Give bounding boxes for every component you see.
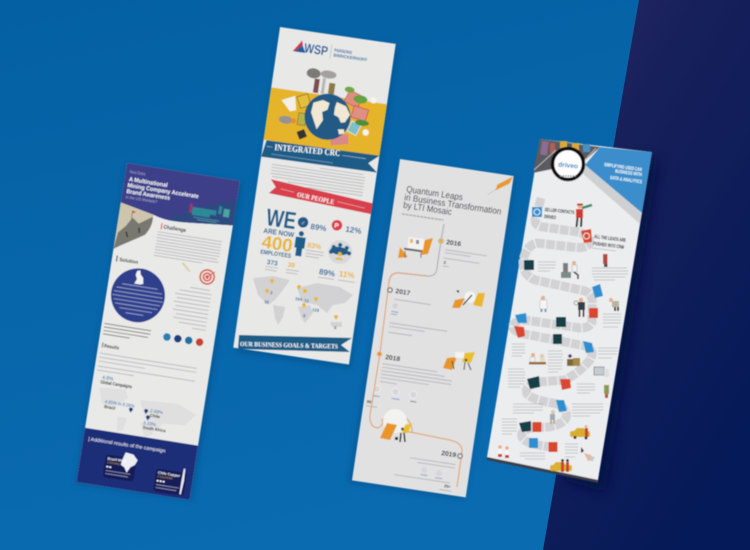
stat: 89 percent men <box>297 216 328 233</box>
stat: we are now 400 employees <box>260 204 298 260</box>
world map: 72 <box>304 298 310 304</box>
ribbon: our people <box>268 179 374 214</box>
ribbon: our people: OUR PEOPLE <box>296 191 335 206</box>
city illustration <box>329 85 378 151</box>
stat row: 89 and 11 percent: 89% <box>318 267 336 278</box>
header: Mining Company Accelerate <box>127 183 200 200</box>
illustration: cliff climbers <box>113 203 155 254</box>
icon: dart <box>181 262 192 272</box>
stat: we are now 400 employees: EMPLOYEES <box>260 250 291 260</box>
step markers <box>514 260 603 452</box>
timeline markers <box>377 238 462 458</box>
social icons <box>163 333 204 347</box>
subtitle <box>402 214 443 220</box>
2019 text: 2019 <box>441 450 457 459</box>
stat row: 373 and 38 <box>265 258 300 274</box>
card: Chile copper: 2 Countries <box>157 474 173 481</box>
stat row: 89 and 11 percent <box>318 266 356 282</box>
card: Brazil mine: 1 Country <box>107 460 121 466</box>
solution note <box>103 323 151 341</box>
timeline path <box>370 224 462 487</box>
card: Brazil mine <box>103 449 139 482</box>
step: all the leads: PUSHED INTO CRM <box>593 241 624 251</box>
panel: LTI Mosaic timeline <box>352 159 514 497</box>
world map: 6 <box>334 325 338 330</box>
intro text <box>269 161 366 196</box>
header <box>119 163 240 230</box>
globe <box>301 91 354 143</box>
figure: meeting people <box>529 353 546 364</box>
header: blue <box>582 147 652 224</box>
WSP logo <box>292 39 369 64</box>
header: How Does <box>129 169 147 177</box>
global campaigns stat: Global Campaigns <box>100 379 133 390</box>
world map: 10 <box>264 299 270 305</box>
stat row: 89 and 11 percent: 11% <box>338 269 355 280</box>
figure: yellow car bottom <box>550 459 572 472</box>
world map: 6 <box>303 313 307 318</box>
stat: we are now 400 employees: 400 <box>260 232 294 256</box>
south africa stat: South Africa <box>142 425 166 433</box>
title <box>403 184 503 224</box>
header: in the US Markets? <box>125 194 158 204</box>
figure: doctor man <box>540 296 547 312</box>
WSP logo: WSP <box>303 40 329 59</box>
section: results <box>97 342 198 385</box>
2016 text: 2016 <box>446 239 462 248</box>
stat: 12 percent women: P <box>334 222 340 230</box>
figure: yellow car <box>570 425 590 440</box>
figure: inspector <box>574 298 585 317</box>
2016 text: 2 <box>443 260 447 265</box>
solution text right <box>170 285 212 330</box>
figure: boxes <box>567 354 580 366</box>
icon: person <box>293 230 307 257</box>
footer: additional results <box>76 428 198 500</box>
stat: 83 percent <box>305 242 325 259</box>
title: by LTI Mosaic <box>403 200 453 217</box>
logo ring <box>552 148 584 180</box>
results map <box>93 385 199 445</box>
world map: 129 <box>312 307 320 313</box>
header: A Multinational <box>128 177 168 189</box>
title: in Business Transformation <box>404 192 502 217</box>
illustration: 2019 <box>380 409 412 442</box>
section: results: Results <box>104 343 120 352</box>
south africa stat: 3.10% <box>143 420 156 427</box>
background: navy panel <box>543 0 750 550</box>
banner: integrated CRC: INTEGRATED CRC <box>274 142 341 158</box>
brazil stat <box>104 399 135 414</box>
section: challenge: Challenge <box>163 225 187 234</box>
world map <box>253 276 353 330</box>
card: Brazil mine: Brazil Mine <box>107 457 127 464</box>
header: Brand Awareness <box>126 189 171 202</box>
global campaigns stat <box>100 375 133 390</box>
card: Chile copper: Chile Copper <box>158 471 181 478</box>
panel: driveo used car infographic <box>487 139 652 483</box>
panel: mining company case study <box>76 163 240 500</box>
header: blue: BUSINESS WITH <box>615 169 643 178</box>
figure: phone guy <box>604 385 609 398</box>
2017 text <box>388 288 452 341</box>
header: city picture <box>533 139 600 173</box>
road <box>513 198 592 447</box>
stat: 12 percent women <box>331 219 362 236</box>
step: seller contacts driveo: SELLER CONTACTS <box>544 207 575 216</box>
illustration: 2018 <box>443 352 475 370</box>
stat row: 373 and 38: 38 <box>287 262 296 270</box>
stat: we are now 400 employees: WE <box>264 204 298 235</box>
industry illustration <box>276 64 337 143</box>
banner: integrated CRC <box>261 137 380 174</box>
stat: 83 percent: 83% <box>307 242 322 251</box>
chile stat: 2.69% <box>150 408 163 415</box>
figure: office worker <box>561 261 578 279</box>
2019 text <box>393 444 457 491</box>
2018 text: 2018 <box>385 354 401 363</box>
step: seller contacts driveo: DRIVEO <box>544 214 556 221</box>
step: all the leads <box>581 229 627 251</box>
stat row: 373 and 38: 373 <box>266 259 278 268</box>
page edge <box>487 457 598 483</box>
world map: 154 <box>295 296 303 302</box>
icon: team circle <box>327 238 354 266</box>
global campaigns stat: 4.8% <box>102 375 114 383</box>
2019 text: 25+ <box>444 484 452 489</box>
yellow band <box>264 87 387 157</box>
step text blocks <box>502 262 628 459</box>
illustration: 2016 <box>398 237 433 258</box>
world map: 2 <box>270 290 274 295</box>
header: blue: SIMPLIFYING USED CAR <box>604 162 642 173</box>
2018 text: 90+ <box>366 400 374 405</box>
figure: monitor <box>594 367 609 377</box>
icon: target <box>199 269 215 285</box>
figure: old man <box>550 410 555 424</box>
panel: WSP integrated CRC infographic <box>233 27 396 364</box>
stat: we are now 400 employees: ARE NOW <box>263 228 295 239</box>
stat: 89 percent men: ♂ <box>300 220 306 227</box>
logo ring: driveo <box>558 162 578 171</box>
corner brush accent <box>488 173 513 198</box>
page <box>487 139 652 480</box>
solution circle <box>107 264 169 326</box>
step: all the leads: ALL THE LEADS ARE <box>594 234 627 244</box>
WSP logo: BRINCKERHOFF <box>333 53 368 62</box>
WSP logo: PARSONS <box>334 48 352 55</box>
brazil stat: 4.65% to 8.26% <box>105 399 135 409</box>
stat: 12 percent women: 12% <box>345 225 362 236</box>
figure: two people <box>498 445 509 458</box>
section: solution: Solution <box>119 257 138 266</box>
header graphic <box>188 201 230 224</box>
figure: hand and car icon <box>581 447 595 462</box>
figure: binocular man <box>576 204 592 227</box>
2017 text: 2017 <box>395 288 411 297</box>
footer: additional results: | Additional results of the campaign <box>88 436 166 455</box>
banner: business goals and targets <box>238 335 352 352</box>
2018 text <box>366 352 454 418</box>
chile stat: Chile <box>149 413 161 419</box>
chile stat <box>143 407 163 420</box>
card: Chile copper <box>153 464 188 496</box>
2016 text <box>443 239 488 272</box>
step: seller contacts driveo <box>532 207 575 221</box>
header: blue: DATA & ANALYTICS <box>610 175 643 186</box>
section: challenge <box>154 223 223 266</box>
figure: man bending <box>609 298 619 311</box>
south africa stat <box>142 415 168 433</box>
brazil stat: Brazil <box>104 404 116 411</box>
stat: 89 percent men: 89% <box>310 222 327 233</box>
banner: business goals and targets: OUR BUSINESS GOALS & TARGETS <box>240 341 338 351</box>
card shadows <box>75 29 658 501</box>
illustration: 2017 <box>452 290 485 308</box>
figure: phone <box>603 254 608 267</box>
title: Quantum Leaps <box>406 184 464 202</box>
